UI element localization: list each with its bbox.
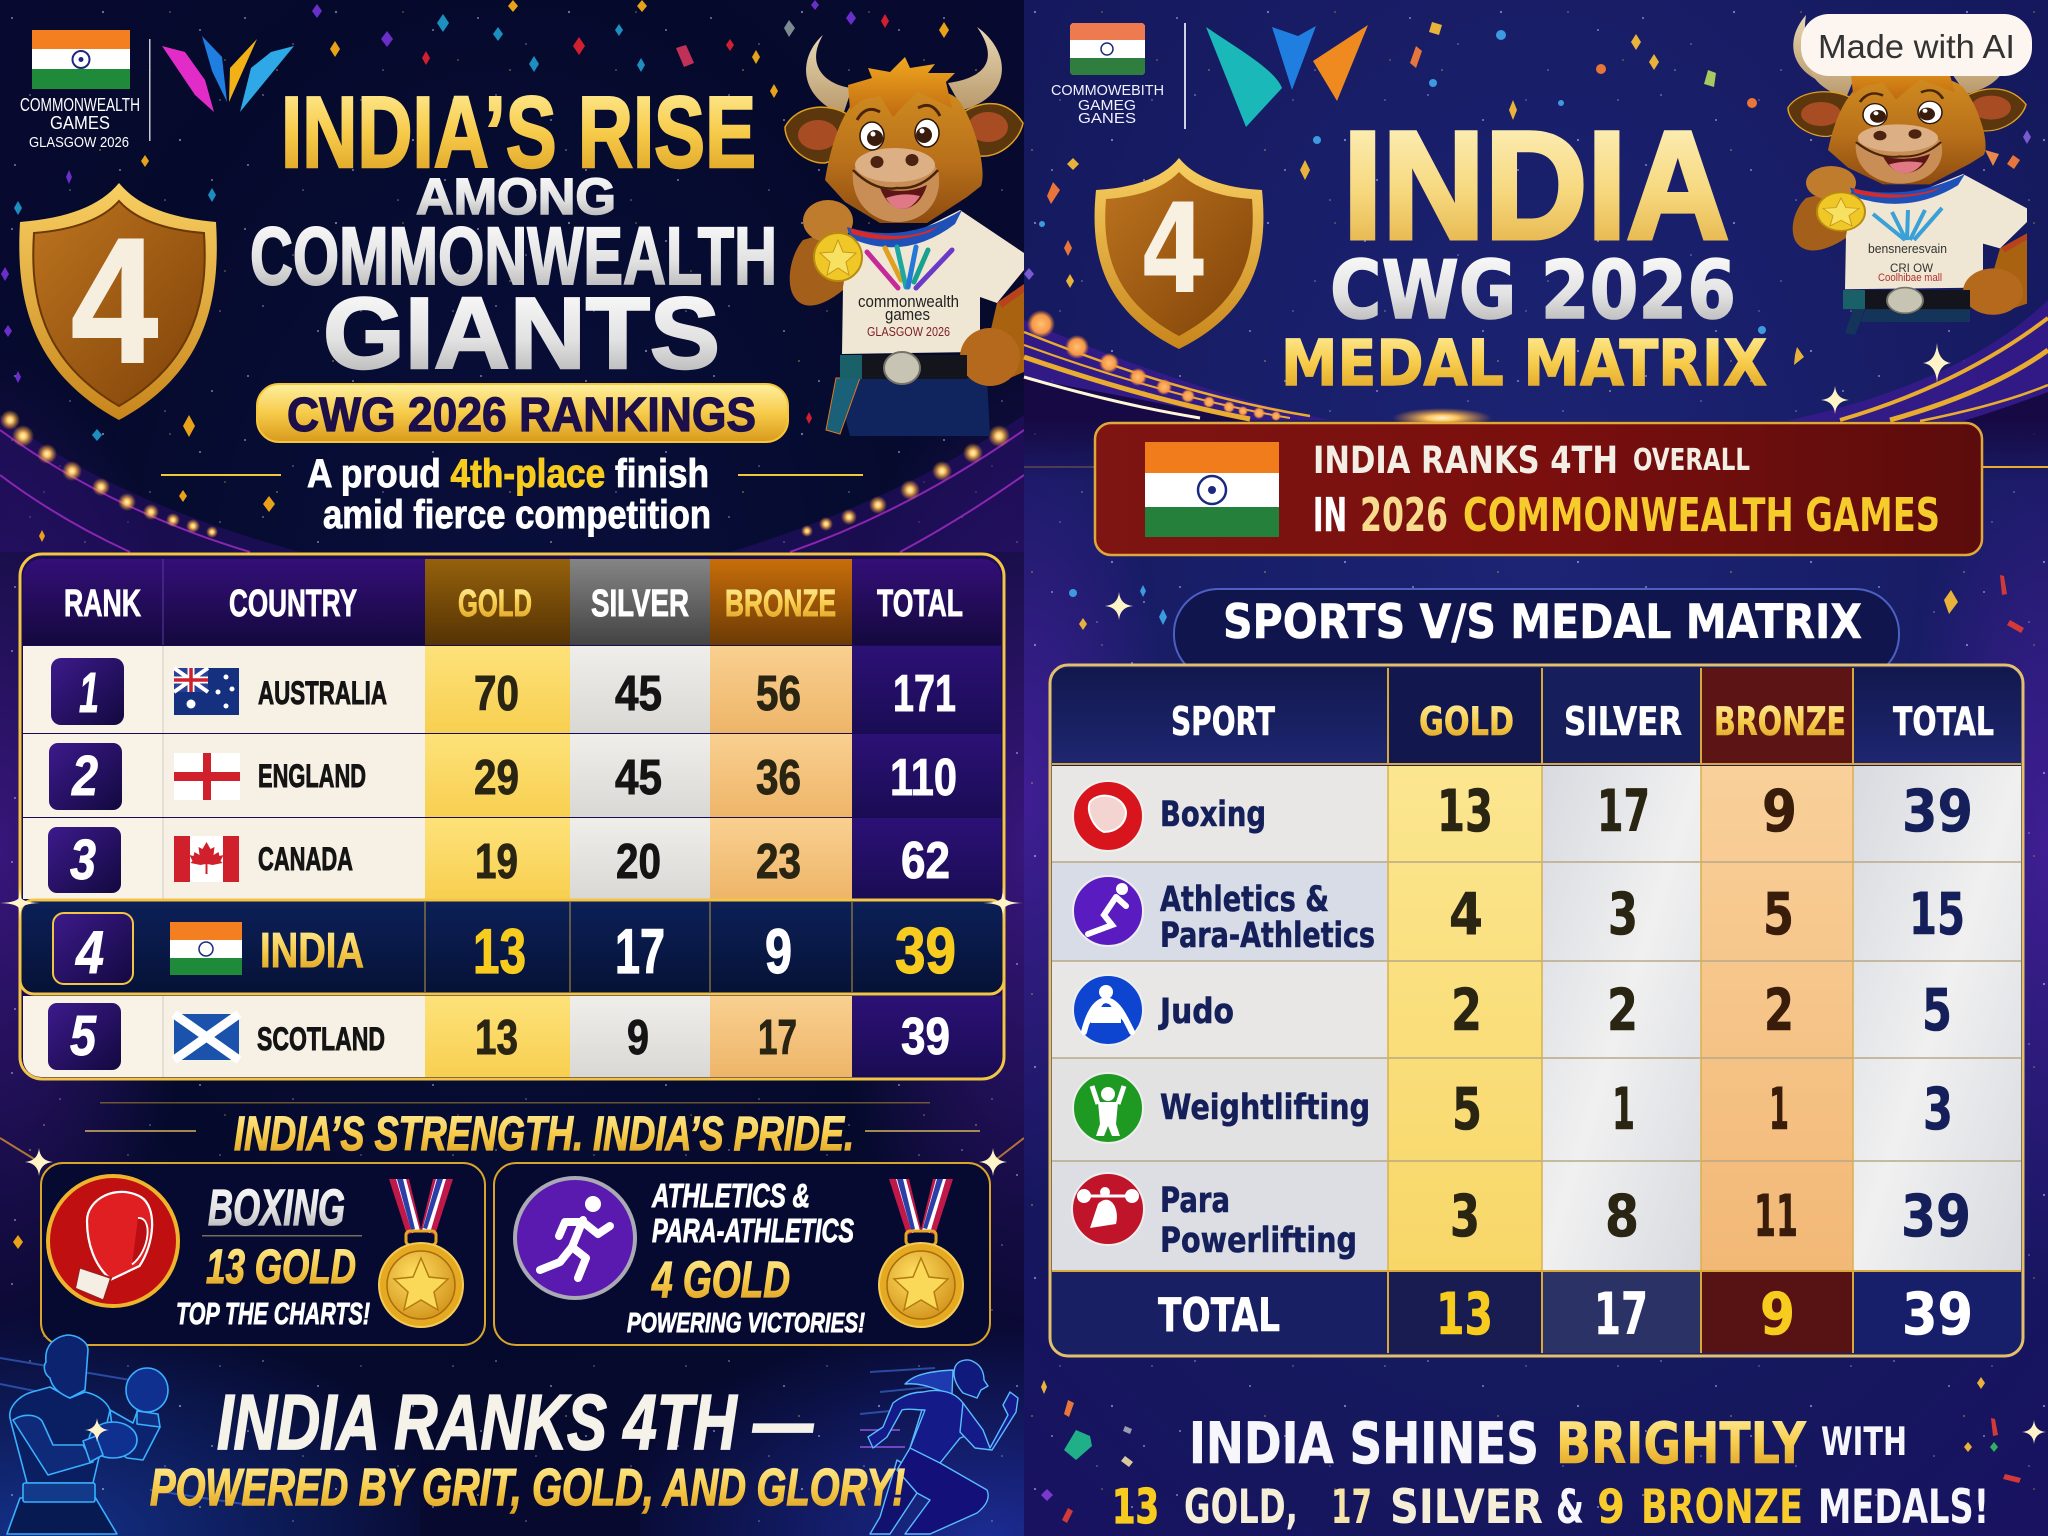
right medal matrix table: [1050, 665, 2023, 1356]
row: Judo: 2: [1764, 976, 1794, 1044]
icon: runner: [515, 1178, 635, 1298]
row: Scotland: SCOTLAND: [257, 1021, 385, 1057]
row: Boxing: Boxing: [1160, 795, 1266, 835]
card: Athletics: 4 GOLD: [651, 1251, 790, 1308]
row: Athletics: Para-Athletics: [1160, 916, 1375, 956]
total row: 9: [1760, 1280, 1795, 1348]
right rank shield: 4: [1140, 178, 1208, 322]
right closing text: GOLD,: [1184, 1480, 1298, 1535]
right closing text: [1112, 1411, 1989, 1535]
right rank banner: [1095, 423, 1982, 555]
row: Boxing: 17: [1597, 777, 1650, 845]
left subtitle: A proud 4th-place finish: [307, 452, 709, 496]
label: games name: GLASGOW 2026: [29, 134, 129, 151]
left title block: GIANTS: [323, 278, 720, 390]
row: England: 110: [890, 749, 957, 807]
row: Weightlifting: 1: [1769, 1075, 1789, 1143]
row: Athletics: 3: [1608, 880, 1638, 948]
label: games name: COMMONWEALTH: [20, 95, 140, 115]
right closing text: 9: [1597, 1480, 1625, 1535]
right title block: CWG 2026: [1330, 244, 1736, 337]
table header row: TOTAL: [877, 583, 963, 625]
row: Boxing: 9: [1762, 777, 1797, 845]
row: Judo: 5: [1922, 976, 1952, 1044]
row: Australia: AUSTRALIA: [258, 675, 387, 711]
row: Australia: [23, 646, 1001, 733]
row: Athletics: 15: [1909, 880, 1965, 948]
left subtitle: amid fierce competition: [323, 493, 711, 537]
total row: 17: [1594, 1280, 1648, 1348]
shirt logo and garbled text: [1868, 208, 1947, 284]
shirt logo and garbled text: CRI OW: [1890, 261, 1934, 275]
table header: [1052, 668, 2021, 764]
row: Weightlifting: 1: [1612, 1075, 1635, 1143]
table header row: RANK: [64, 583, 141, 625]
table header row: BRONZE: [725, 583, 836, 625]
right header: flag and games lockup: [1051, 23, 1368, 129]
card: Athletics: PARA-ATHLETICS: [652, 1212, 854, 1249]
label: games name: GAMEG: [1078, 97, 1136, 114]
label: games name: [20, 95, 140, 151]
row: Scotland: 17: [758, 1011, 797, 1065]
row: Australia: 1: [79, 661, 99, 725]
left title block: INDIA’S RISE: [281, 77, 756, 189]
left subtitle: [161, 452, 863, 537]
row: England: 2: [71, 744, 98, 808]
label: games name: [1051, 82, 1164, 127]
left rank shield: 4: [71, 201, 158, 400]
right matrix heading pill: [1174, 589, 1899, 679]
row: Judo: [1073, 975, 1952, 1045]
label: games name: GANES: [1078, 110, 1136, 127]
right closing text: 17: [1331, 1480, 1372, 1535]
shirt logo and garbled text: bensneresvain: [1868, 241, 1947, 256]
row: Scotland: 13: [475, 1011, 518, 1065]
label: games name: GAMES: [50, 113, 110, 133]
row: India highlight: INDIA: [260, 924, 364, 978]
figure: runner silhouette: [868, 1360, 1018, 1534]
left rankings pill: CWG 2026 RANKINGS: [287, 389, 756, 442]
row: Boxing: [1073, 777, 1973, 851]
total row: [1052, 1271, 2021, 1353]
right title block: [1281, 100, 1767, 400]
row: Canada: 23: [756, 835, 801, 889]
right closing text: BRONZE: [1641, 1480, 1803, 1535]
table header: GOLD: [1419, 700, 1514, 745]
row: England: 29: [474, 751, 519, 805]
row: Athletics: [1073, 876, 1965, 956]
right closing text: INDIA SHINES: [1189, 1411, 1539, 1477]
row: Para Powerlifting: 8: [1605, 1182, 1639, 1250]
figure: boxer silhouette: [7, 1335, 168, 1534]
shirt text: games: [885, 305, 930, 324]
made with AI badge: [1801, 14, 2032, 76]
card: Boxing: 13 GOLD: [206, 1241, 356, 1294]
row: Australia: 45: [615, 667, 662, 721]
left mascot: [785, 27, 1024, 436]
row: England: [23, 734, 1001, 817]
row: India highlight: 13: [473, 917, 526, 987]
icon: India flag: [32, 30, 130, 89]
left header: India flag and Commonwealth Games lockup: [20, 30, 294, 151]
left title block: [250, 77, 777, 390]
right poster background: [1024, 0, 2048, 1536]
left closing headline: POWERED BY GRIT, GOLD, AND GLORY!: [150, 1459, 905, 1517]
table header: BRONZE: [1714, 700, 1846, 745]
right rank banner: 2026: [1360, 488, 1448, 542]
shirt text: [858, 292, 959, 339]
icon: games logo: [1206, 25, 1368, 127]
row: India highlight: [20, 900, 1004, 994]
right closing text: 13: [1112, 1480, 1159, 1535]
right closing text: SILVER: [1390, 1480, 1543, 1535]
table header: SPORT: [1171, 700, 1275, 745]
icon: gold medal: [879, 1179, 963, 1327]
right title block: INDIA: [1343, 100, 1729, 271]
table header: TOTAL: [1893, 700, 1994, 745]
shirt logo: [867, 247, 952, 288]
row: Canada: [23, 818, 1001, 899]
row: Canada: CANADA: [258, 841, 353, 877]
left title block: AMONG: [416, 168, 616, 225]
row: Canada: 19: [475, 835, 518, 889]
row: Scotland: 5: [70, 1004, 97, 1068]
left rank shield: [19, 183, 217, 420]
shirt logo and garbled text: Coolhibae mall: [1878, 272, 1942, 284]
icon: boxing glove: [48, 1176, 178, 1306]
shirt text: GLASGOW 2026: [867, 324, 950, 339]
right confetti: [1024, 22, 2046, 1523]
right closing text: &: [1556, 1480, 1584, 1535]
row: Para Powerlifting: 3: [1450, 1182, 1480, 1250]
row: Para Powerlifting: 39: [1901, 1182, 1971, 1250]
right rank banner: INDIA RANKS 4TH: [1313, 439, 1618, 482]
row: Para Powerlifting: Powerlifting: [1160, 1221, 1357, 1261]
left title block: COMMONWEALTH: [250, 211, 777, 302]
right title block: MEDAL MATRIX: [1281, 327, 1767, 400]
sparkles on India row: [0, 885, 1023, 921]
row: Australia: 70: [474, 667, 519, 721]
row: Para Powerlifting: [1072, 1173, 1971, 1261]
right rank banner: IN: [1313, 488, 1347, 542]
row: India highlight: 39: [895, 914, 956, 987]
row: Para Powerlifting: Para: [1160, 1181, 1230, 1221]
row: Canada: 3: [70, 828, 96, 892]
row: Canada: 20: [616, 835, 661, 889]
right matrix heading pill: SPORTS V/S MEDAL MATRIX: [1223, 595, 1862, 650]
table body cell columns: [1052, 766, 2021, 1271]
row: Scotland: 9: [627, 1011, 649, 1065]
right mascot: [1788, 15, 2027, 335]
row: Athletics: 5: [1763, 880, 1794, 948]
row: Judo: Judo: [1158, 992, 1234, 1032]
row: Judo: 2: [1451, 976, 1482, 1044]
row: England: 45: [615, 751, 662, 805]
left slogan: [0, 1102, 1024, 1176]
right closing text: BRIGHTLY: [1556, 1411, 1807, 1477]
row: Canada: 62: [901, 832, 950, 890]
label: games name: COMMOWEBITH: [1051, 82, 1164, 99]
icon: India flag: [1145, 442, 1279, 537]
row: Weightlifting: Weightlifting: [1160, 1088, 1370, 1128]
shirt text: commonwealth: [858, 292, 959, 311]
row: India highlight: 17: [615, 917, 665, 987]
total row: 39: [1902, 1280, 1973, 1348]
icon: India flag: [1070, 23, 1145, 75]
card: Boxing: [41, 1163, 485, 1345]
card: Athletics: POWERING VICTORIES!: [627, 1307, 865, 1338]
row: Australia: 171: [893, 665, 956, 723]
made with AI badge: Made with AI: [1818, 28, 2015, 65]
left rankings table: [0, 554, 1023, 1079]
left confetti and stadium lights: [0, 0, 1010, 1249]
row: England: ENGLAND: [258, 758, 366, 794]
row: Judo: 2: [1607, 976, 1638, 1044]
left closing headline: INDIA RANKS 4TH —: [217, 1378, 814, 1466]
card: Athletics: [494, 1163, 990, 1345]
icon: games logo petals: [162, 36, 294, 112]
table header row: GOLD: [458, 583, 532, 625]
left slogan: INDIA’S STRENGTH. INDIA’S PRIDE.: [234, 1108, 854, 1161]
row: India highlight: 4: [75, 919, 104, 986]
left poster background: [0, 0, 1024, 1536]
card: Athletics: ATHLETICS &: [651, 1177, 810, 1214]
row: Weightlifting: 5: [1452, 1075, 1482, 1143]
right rank shield: [1095, 158, 1263, 349]
row: Scotland: [23, 996, 1001, 1077]
row: Boxing: 13: [1437, 777, 1493, 845]
table header: SILVER: [1564, 700, 1682, 745]
total row: 13: [1436, 1280, 1493, 1348]
row: Para Powerlifting: 11: [1754, 1182, 1798, 1250]
total row: TOTAL: [1158, 1288, 1280, 1342]
row: Athletics: 4: [1449, 880, 1483, 948]
row: England: 36: [756, 751, 801, 805]
card: Boxing: TOP THE CHARTS!: [176, 1296, 370, 1331]
row: Boxing: 39: [1902, 777, 1973, 845]
right closing text: WITH: [1821, 1420, 1907, 1465]
row: Athletics: Athletics &: [1160, 880, 1329, 920]
row: Australia: 56: [756, 667, 801, 721]
icon: gold medal: [379, 1179, 463, 1327]
table header row: COUNTRY: [229, 583, 357, 625]
table header row: [23, 559, 1001, 645]
row: India highlight: 9: [765, 917, 792, 987]
row: Weightlifting: [1073, 1073, 1953, 1143]
table header row: SILVER: [591, 583, 689, 625]
row: Weightlifting: 3: [1923, 1075, 1953, 1143]
card: Boxing: BOXING: [208, 1179, 345, 1236]
right rank banner: OVERALL: [1633, 443, 1750, 478]
left closing headline: [150, 1378, 905, 1517]
row: Scotland: 39: [901, 1008, 950, 1066]
